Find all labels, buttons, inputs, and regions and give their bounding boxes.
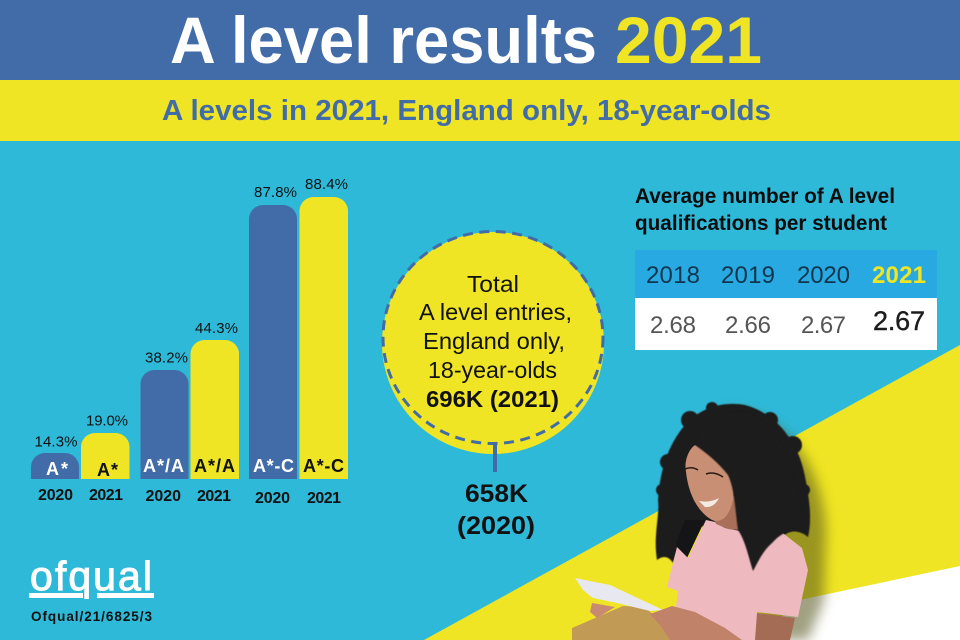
table: average qualifications: 2.68 — [650, 312, 696, 339]
bar: A*-C 2021 — [300, 176, 348, 507]
bar: A* 2020 — [31, 434, 79, 504]
circle: total entries: 696K (2021) — [426, 386, 559, 412]
table: average qualifications: 2020 — [797, 262, 850, 289]
bar: A*/A 2020: 38.2% — [145, 350, 188, 367]
bar: A* 2021 — [81, 412, 130, 504]
bar: A* 2021: A* — [97, 460, 118, 480]
callout: 2020 entries: (2020) — [457, 512, 535, 540]
heading: average qualifications: qualifications per student — [635, 212, 887, 235]
bar: A* 2021: 19.0% — [86, 412, 128, 430]
table: average qualifications: 2.67 — [873, 306, 925, 336]
bar: A*/A 2021 — [190, 320, 239, 505]
table: average qualifications: 2018 — [646, 262, 700, 289]
bar: A* 2021: 2021 — [89, 487, 123, 504]
bar chart — [31, 176, 348, 507]
connector line — [493, 443, 497, 472]
yellow diagonal shape — [424, 345, 960, 640]
subtitle banner — [0, 80, 960, 141]
backpack strap — [675, 520, 705, 578]
mouth — [699, 498, 719, 507]
callout: 2020 entries — [457, 480, 535, 540]
hair front — [695, 411, 804, 571]
table: average qualifications: 2.67 — [801, 312, 846, 339]
envelope — [572, 606, 680, 640]
subtitle banner: A levels in 2021, England only, 18-year-olds — [162, 95, 771, 127]
bar: A*/A 2021: 2021 — [197, 488, 231, 505]
circle: total entries: A level entries, — [419, 299, 572, 325]
table: average qualifications: 2.66 — [725, 312, 771, 339]
t-shirt — [667, 520, 808, 640]
circle: total entries: Total — [467, 271, 519, 297]
hair back — [656, 402, 810, 571]
bar: A* 2020: A* — [46, 459, 68, 479]
callout: 2020 entries: 658K — [465, 480, 528, 508]
bar: A*/A 2020: 2020 — [146, 488, 181, 505]
heading: average qualifications — [635, 185, 895, 235]
shadow behind student — [720, 411, 826, 640]
bar: A*/A 2020: A*/A — [143, 456, 184, 476]
bar: A* 2020: 2020 — [38, 487, 73, 504]
paper — [575, 578, 663, 611]
bar: A*-C 2021: 88.4% — [305, 176, 348, 193]
table: average qualifications: 2021 — [872, 262, 926, 289]
neck — [712, 495, 740, 530]
title banner — [0, 0, 960, 80]
reference code: Ofqual/21/6825/3 — [31, 609, 152, 624]
table: average qualifications — [635, 250, 937, 350]
circle: total entries: 18-year-olds — [428, 357, 557, 383]
right hand — [650, 606, 742, 640]
left hand — [590, 603, 615, 618]
photo: student reading results — [572, 402, 826, 640]
circle: total entries: England only, — [423, 328, 565, 354]
forearm — [755, 613, 795, 640]
logo: ofqual: ofqual — [30, 553, 152, 599]
bar: A*-C 2020: A*-C — [253, 456, 294, 476]
bar: A*-C 2020: 2020 — [255, 490, 290, 507]
eyes — [685, 468, 723, 477]
circle: total entries — [382, 232, 604, 454]
bar: A*-C 2021: 2021 — [307, 490, 341, 507]
table: average qualifications: 2019 — [721, 262, 775, 289]
bar: A*/A 2021: A*/A — [194, 456, 235, 476]
bar: A*-C 2021: A*-C — [303, 456, 344, 476]
title banner: 2021 — [615, 3, 762, 77]
bar: A*/A 2020 — [140, 350, 188, 505]
title banner: A level results — [170, 3, 597, 77]
face — [685, 445, 734, 521]
bar: A*/A 2021: 44.3% — [195, 320, 238, 337]
bar: A*-C 2020: 87.8% — [254, 184, 297, 201]
bar: A* 2020: 14.3% — [34, 434, 78, 450]
heading: average qualifications: Average number of A level — [635, 185, 895, 208]
white corner shape — [770, 566, 960, 640]
bar: A*-C 2020 — [249, 184, 297, 507]
